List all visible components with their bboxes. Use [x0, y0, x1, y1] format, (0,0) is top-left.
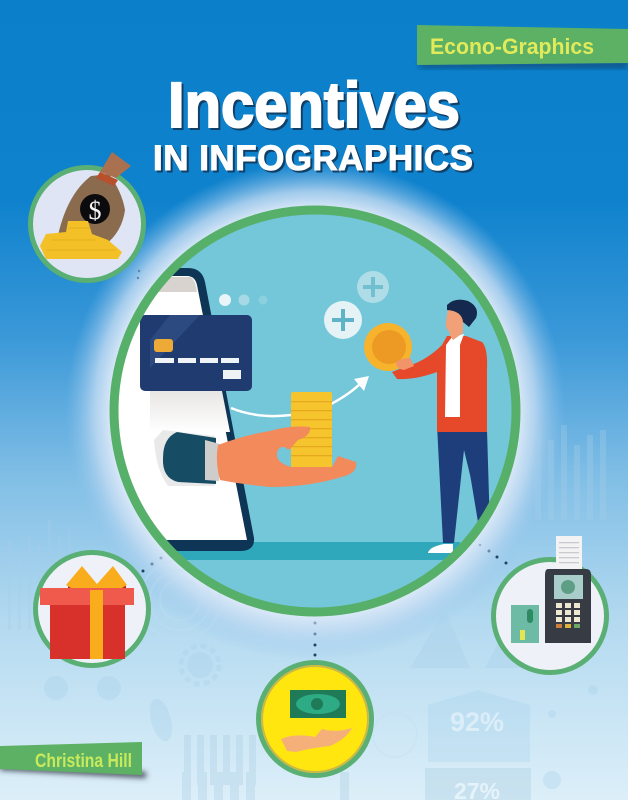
person	[392, 300, 490, 553]
series banner: Econo-Graphics	[430, 34, 594, 59]
coin stack	[291, 392, 332, 468]
floor band	[170, 542, 460, 560]
icon: gift box	[36, 552, 148, 666]
title	[153, 69, 475, 180]
plus badges	[324, 271, 389, 339]
hand with sleeve	[154, 426, 356, 487]
indicator dots	[219, 294, 268, 306]
icon: payment terminal	[494, 536, 606, 672]
title: Incentives	[170, 71, 462, 143]
credit card	[140, 315, 252, 391]
author banner	[0, 742, 146, 778]
main circle illustration	[90, 210, 516, 612]
faint background infographic pattern: 92%	[450, 707, 504, 737]
phone	[118, 268, 254, 551]
faint background infographic pattern	[8, 425, 606, 800]
author banner: Christina Hill	[35, 751, 132, 772]
title: Incentives	[168, 69, 460, 141]
icon: money bag	[30, 152, 144, 280]
title: IN INFOGRAPHICS	[155, 141, 475, 180]
connector dots	[137, 270, 508, 656]
series banner	[417, 25, 628, 68]
icon: money bag: $	[88, 196, 102, 225]
icon: hand with banknote	[258, 662, 372, 776]
title: IN INFOGRAPHICS	[153, 139, 473, 178]
gold coin	[364, 323, 414, 371]
arrow	[231, 376, 369, 416]
